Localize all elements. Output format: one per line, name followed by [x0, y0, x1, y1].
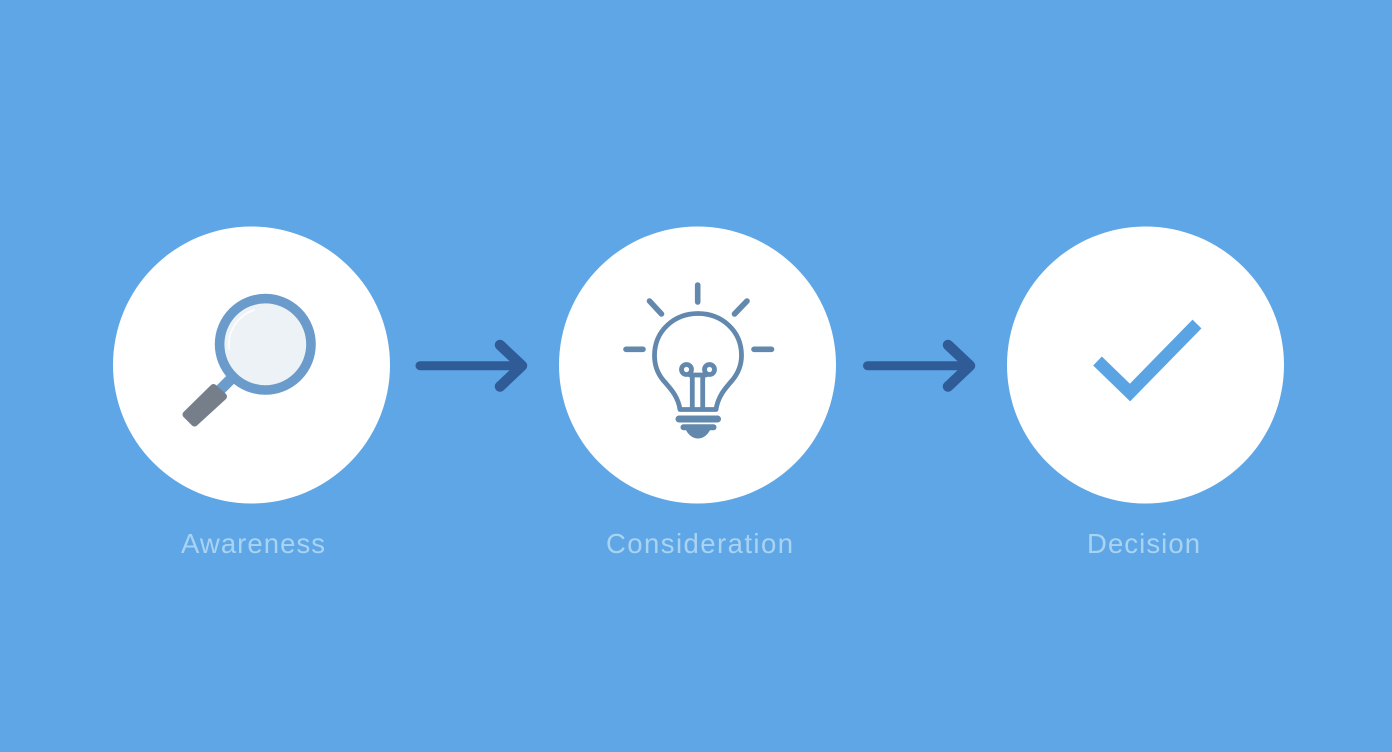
arrow: consideration to decision: [868, 345, 970, 386]
white circle: awareness: [113, 226, 390, 504]
icon: magnifying glass: [186, 299, 311, 423]
panel: decision stage: [1007, 226, 1284, 559]
white circle: decision: [1007, 226, 1284, 504]
panel: consideration stage: [559, 226, 836, 559]
label: Decision: Decision: [1087, 528, 1200, 559]
label: Consideration: Consideration: [606, 528, 793, 559]
label: Awareness: Awareness: [181, 528, 325, 559]
arrow: awareness to consideration: [420, 345, 522, 386]
icon: light bulb: [626, 285, 772, 438]
icon: check mark: [1098, 324, 1197, 392]
white circle: consideration: [559, 226, 836, 504]
panel: awareness stage: [113, 226, 390, 559]
